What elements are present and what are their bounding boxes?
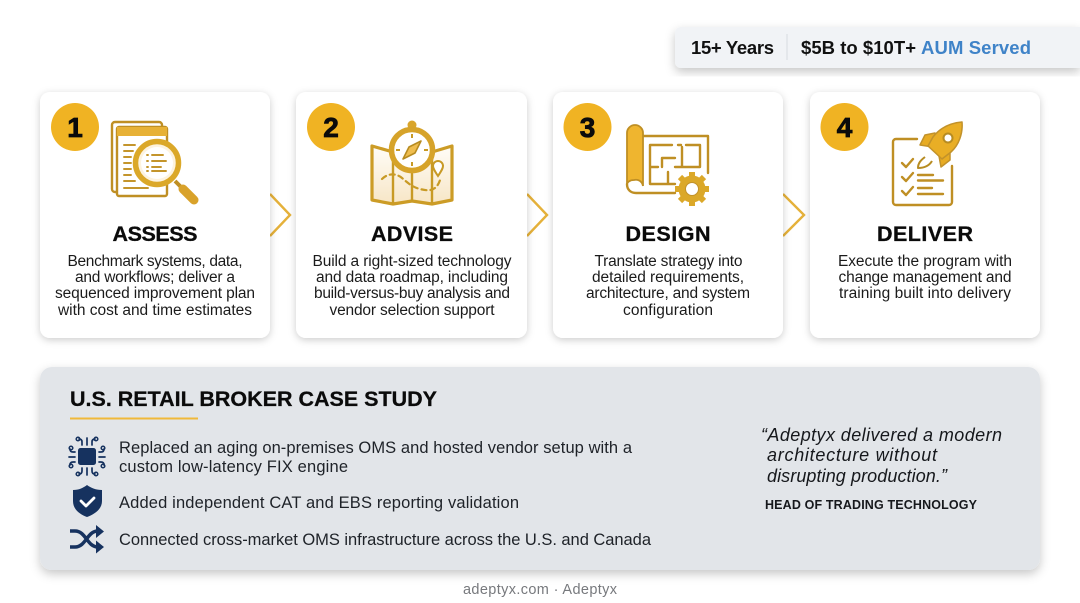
description: Execute the program with [838,253,1012,270]
number badge 1: 1 [67,112,83,143]
icon: blueprint and gear [627,125,709,206]
case study heading: U.S. RETAIL BROKER CASE STUDY [70,387,437,411]
bullet: replaced OMS: custom low-latency FIX engine [119,458,348,476]
icon: shield with check [73,485,102,517]
number badge 2 [307,103,355,151]
stats banner: 15+ Years [691,37,774,58]
footer: adeptyx.com · Adeptyx [463,582,618,598]
description: detailed requirements, [592,269,744,286]
panel: design [553,92,783,338]
panel: advise [296,92,527,338]
description: training built into delivery [839,285,1011,302]
number badge 4: 4 [837,112,853,143]
number badge 3: 3 [580,112,595,143]
description [586,253,750,319]
description: Build a right-sized technology [312,253,512,270]
number badge 1 [51,103,99,151]
bullet: reporting validation: Added independent CAT and EBS reporting validation [119,494,519,512]
stats banner: AUM Served [921,37,1031,58]
chevron: advise to design [527,194,547,236]
number badge 2: 2 [323,112,339,143]
description [55,253,255,319]
bullet: replaced OMS: Replaced an aging on-premises OMS and hosted vendor setup with a [119,439,633,457]
panel: case study [40,367,1040,570]
bullet: replaced OMS [119,439,633,476]
description: change management and [838,269,1012,286]
icon: map and compass [372,120,452,204]
description: build-versus-buy analysis and [314,285,510,302]
customer quote: architecture without [767,445,938,465]
panel: deliver [810,92,1040,338]
description: Benchmark systems, data, [68,253,242,270]
icon: circuit chip [69,437,105,476]
description: Translate strategy into [594,253,742,270]
description: configuration [623,302,713,319]
chevron: assess to advise [270,194,290,236]
title: DELIVER [877,222,973,246]
customer quote: disrupting production.” [767,466,948,486]
quote attribution: HEAD OF TRADING TECHNOLOGY [765,498,978,512]
icon: checklist and rocket [893,122,962,205]
description: sequenced improvement plan [55,285,255,302]
icon: document with magnifier [112,122,194,200]
stats banner: $5B to $10T+ [801,37,916,58]
title: DESIGN [626,222,710,246]
panel: assess [40,92,270,338]
number badge 3 [564,103,612,151]
title: ADVISE [371,222,453,246]
stats banner [675,27,1080,68]
icon: crossing arrows [70,525,104,554]
description: vendor selection support [330,302,495,319]
description [838,253,1012,302]
description: with cost and time estimates [57,302,252,319]
customer quote [761,425,1002,486]
title: ASSESS [112,222,198,246]
bullet: cross-market OMS: Connected cross-market OMS infrastructure across the U.S. and Canada [119,531,652,549]
chevron: design to deliver [783,194,804,236]
customer quote: “Adeptyx delivered a modern [761,425,1002,445]
heading underline [70,418,198,420]
description: architecture, and system [586,285,750,302]
description [312,253,512,319]
number badge 4 [820,103,868,151]
description: and data roadmap, including [316,269,508,286]
description: and workflows; deliver a [75,269,235,286]
